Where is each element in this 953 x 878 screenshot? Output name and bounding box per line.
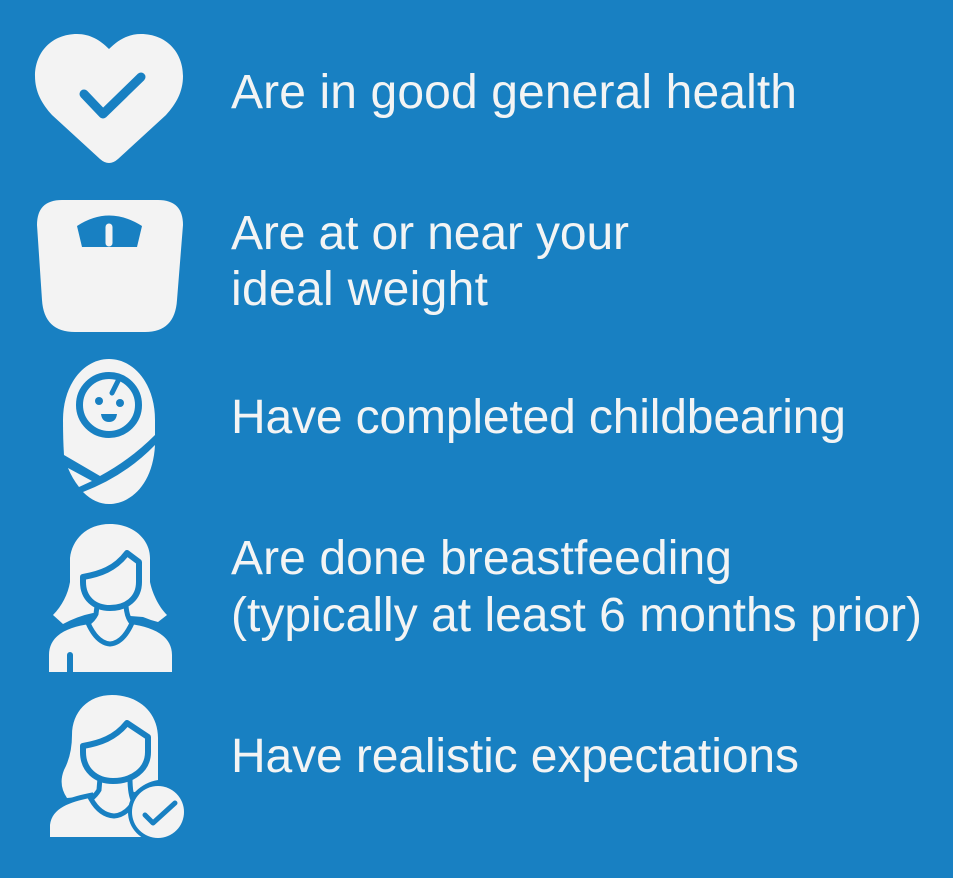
icon: heart with check [35, 34, 183, 163]
text: ideal weight: ideal weight [231, 263, 488, 316]
text: ideal weight [231, 207, 629, 316]
text: ideal weight: Are at or near your [231, 207, 629, 260]
icon: woman with check badge [50, 695, 188, 842]
text: realistic expectations: Have realistic expectations [231, 730, 799, 783]
icon: weighing scale [37, 200, 183, 332]
text: completed childbearing: Have completed childbearing [231, 391, 846, 444]
text: good general health: Are in good general health [231, 66, 797, 119]
icon: woman [49, 524, 172, 672]
text: done breastfeeding: Are done breastfeeding [231, 532, 732, 585]
icon: swaddled baby [63, 359, 155, 504]
text: done breastfeeding [231, 532, 922, 642]
text: done breastfeeding: (typically at least 6 months prior) [231, 589, 922, 642]
